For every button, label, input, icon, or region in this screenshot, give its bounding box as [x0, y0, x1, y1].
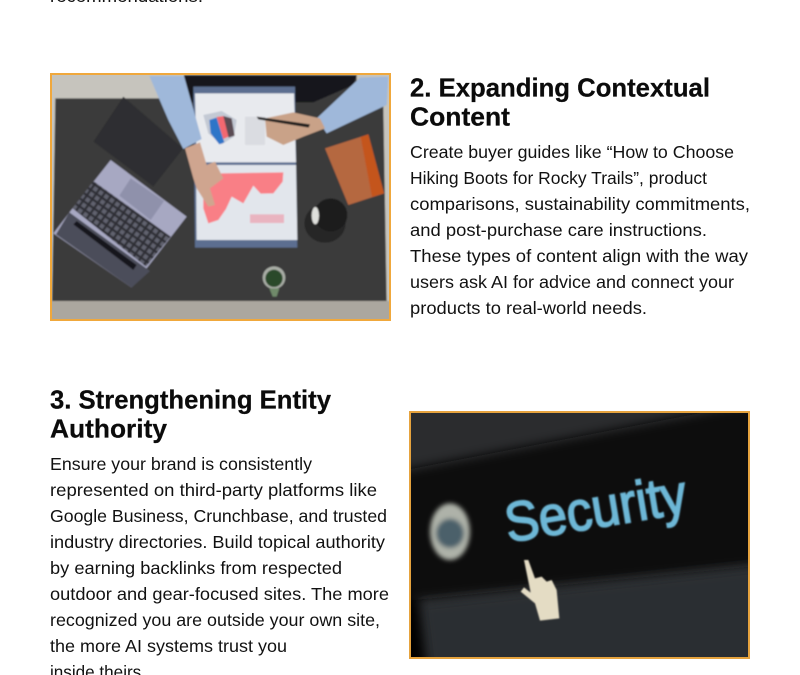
lower screen band [428, 566, 748, 602]
left hand [185, 142, 223, 207]
lower floor strip [52, 300, 389, 319]
screen upper band [411, 413, 748, 657]
right hand [265, 112, 325, 145]
cup shadow [304, 204, 346, 243]
text block: entity authority [50, 454, 389, 675]
folder [193, 87, 297, 248]
dark menu band [411, 413, 748, 602]
text block: entity authority: Google Business, Crunchbase, and trusted [50, 506, 387, 526]
notebook [325, 134, 384, 205]
text block: contextual content: Create buyer guides like “How to Choose [410, 142, 734, 162]
left shadow [411, 595, 430, 657]
person's torso [184, 75, 357, 102]
Security word: Security [500, 462, 691, 555]
small chart [203, 111, 237, 144]
text block: contextual content [410, 142, 750, 318]
keyboard [73, 181, 171, 267]
text block: entity authority: outdoor and gear-focused sites. The more [50, 584, 389, 604]
text block: contextual content: These types of content align with the way [410, 246, 748, 266]
plant [263, 266, 285, 289]
photo: blurred Security text on a screen with a hand cursor [409, 411, 750, 659]
photo: overhead view of a desk with charts and a laptop [50, 73, 393, 324]
tablet case [93, 97, 183, 187]
text block: contextual content: Hiking Boots for Rocky Trails”, product [410, 168, 707, 188]
hinge and screen [56, 212, 150, 288]
area chart [197, 172, 283, 223]
heading: 2. Expanding Contextual Content: Content [410, 102, 510, 132]
upside-down chart figure [250, 214, 284, 223]
floor behind the desk [52, 75, 389, 302]
text block: contextual content: users ask AI for advice and connect your [410, 272, 734, 292]
upper page [195, 93, 296, 162]
text block: entity authority: the more AI systems trust you [50, 636, 287, 656]
text block: entity authority: recognized you are outside your own site, [50, 610, 380, 630]
text block: contextual content: and post-purchase care instructions. [410, 220, 707, 240]
text block: contextual content: comparisons, sustainability commitments, [410, 194, 750, 214]
heading: 3. Strengthening Entity Authority: Authority [50, 414, 168, 444]
text block: entity authority: represented on third-party platforms like [50, 480, 377, 500]
text block: entity authority: Ensure your brand is consistently [50, 454, 312, 474]
hand cursor [521, 560, 559, 621]
lower page [196, 165, 297, 240]
pen [257, 117, 310, 128]
trackpad [119, 178, 164, 220]
heading: 2. Expanding Contextual Content: 2. Expanding Contextual [410, 72, 710, 102]
notes [245, 117, 265, 145]
text block: entity authority: by earning backlinks from respected [50, 558, 342, 578]
cup [314, 198, 347, 232]
heading: 2. Expanding Contextual Content [410, 72, 710, 132]
shield icon [430, 503, 470, 560]
left sleeve [149, 76, 202, 149]
heading: 3. Strengthening Entity Authority: 3. Strengthening Entity [50, 384, 332, 414]
laptop [53, 160, 187, 288]
right sleeve [317, 77, 388, 133]
text block: entity authority: industry directories. Build topical authority [50, 532, 385, 552]
desk surface [52, 75, 387, 301]
text block: contextual content: products to real-world needs. [410, 298, 647, 318]
heading: 3. Strengthening Entity Authority [50, 384, 332, 444]
